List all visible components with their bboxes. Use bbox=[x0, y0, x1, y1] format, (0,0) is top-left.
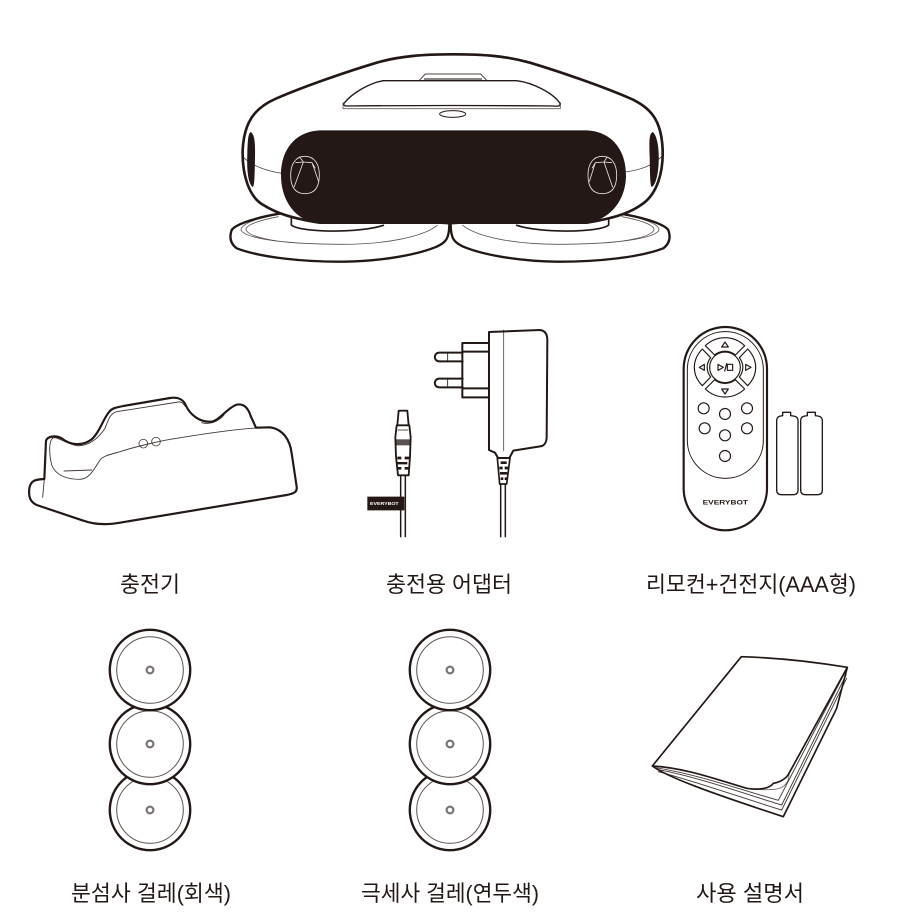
top handle bbox=[419, 74, 487, 80]
adapter body bbox=[489, 330, 547, 458]
manual cover bbox=[652, 657, 847, 789]
left mop pad bbox=[230, 213, 449, 262]
remote control and batteries illustration bbox=[684, 327, 822, 530]
round buttons bbox=[698, 403, 752, 461]
robot mop illustration bbox=[230, 54, 670, 262]
manual page edges bbox=[655, 672, 847, 810]
right wheel sensor bbox=[588, 156, 617, 194]
remote body bbox=[684, 327, 767, 530]
front black panel bbox=[281, 130, 626, 224]
button area bbox=[687, 332, 763, 478]
cable tag: EVERYBOT bbox=[370, 501, 399, 506]
power adapter illustration bbox=[367, 330, 547, 537]
pad middle bbox=[110, 704, 190, 784]
directional pad bbox=[694, 338, 756, 397]
remote logo: EVERYBOT bbox=[703, 500, 748, 507]
batteries bbox=[777, 412, 822, 495]
right mop pad bbox=[451, 213, 670, 262]
label: remote and batteries: 리모컨+건전지(AAA형) bbox=[646, 572, 856, 597]
pad bottom bbox=[410, 770, 490, 850]
pad bottom bbox=[110, 770, 190, 850]
label: green mop: 극세사 걸레(연두색) bbox=[361, 881, 539, 906]
label: charging adapter: 충전용 어댑터 bbox=[386, 572, 512, 597]
DC plug bbox=[395, 411, 411, 475]
adapter prongs bbox=[435, 353, 463, 387]
mop pads green set bbox=[410, 630, 490, 850]
side seam lines bbox=[243, 157, 662, 173]
adapter cable bbox=[501, 485, 505, 537]
label: user manual: 사용 설명서 bbox=[696, 881, 804, 906]
pad top bbox=[110, 630, 190, 710]
charger base bbox=[29, 398, 297, 524]
charging contacts bbox=[139, 437, 160, 448]
mop hubs bbox=[291, 218, 383, 231]
DC cable bbox=[401, 476, 405, 537]
side slots bbox=[247, 132, 255, 187]
cradle details bbox=[43, 402, 256, 497]
top lid bbox=[344, 81, 560, 106]
pad middle bbox=[410, 704, 490, 784]
left wheel sensor bbox=[291, 156, 319, 194]
cable tag bbox=[367, 497, 404, 510]
user manual illustration bbox=[652, 657, 847, 817]
top sensor bbox=[440, 111, 466, 117]
label: charger: 충전기 bbox=[120, 572, 180, 597]
label: gray mop: 분섬사 걸레(회색) bbox=[71, 881, 231, 906]
pad top bbox=[410, 630, 490, 710]
page curl bbox=[750, 773, 789, 790]
adapter strain relief bbox=[497, 458, 510, 484]
manual page stack bbox=[652, 667, 847, 817]
adapter neck bbox=[462, 343, 489, 397]
mop pads gray set bbox=[110, 630, 190, 850]
pad inner rings bbox=[241, 214, 659, 244]
charger illustration bbox=[29, 398, 297, 524]
robot body bbox=[243, 54, 663, 223]
